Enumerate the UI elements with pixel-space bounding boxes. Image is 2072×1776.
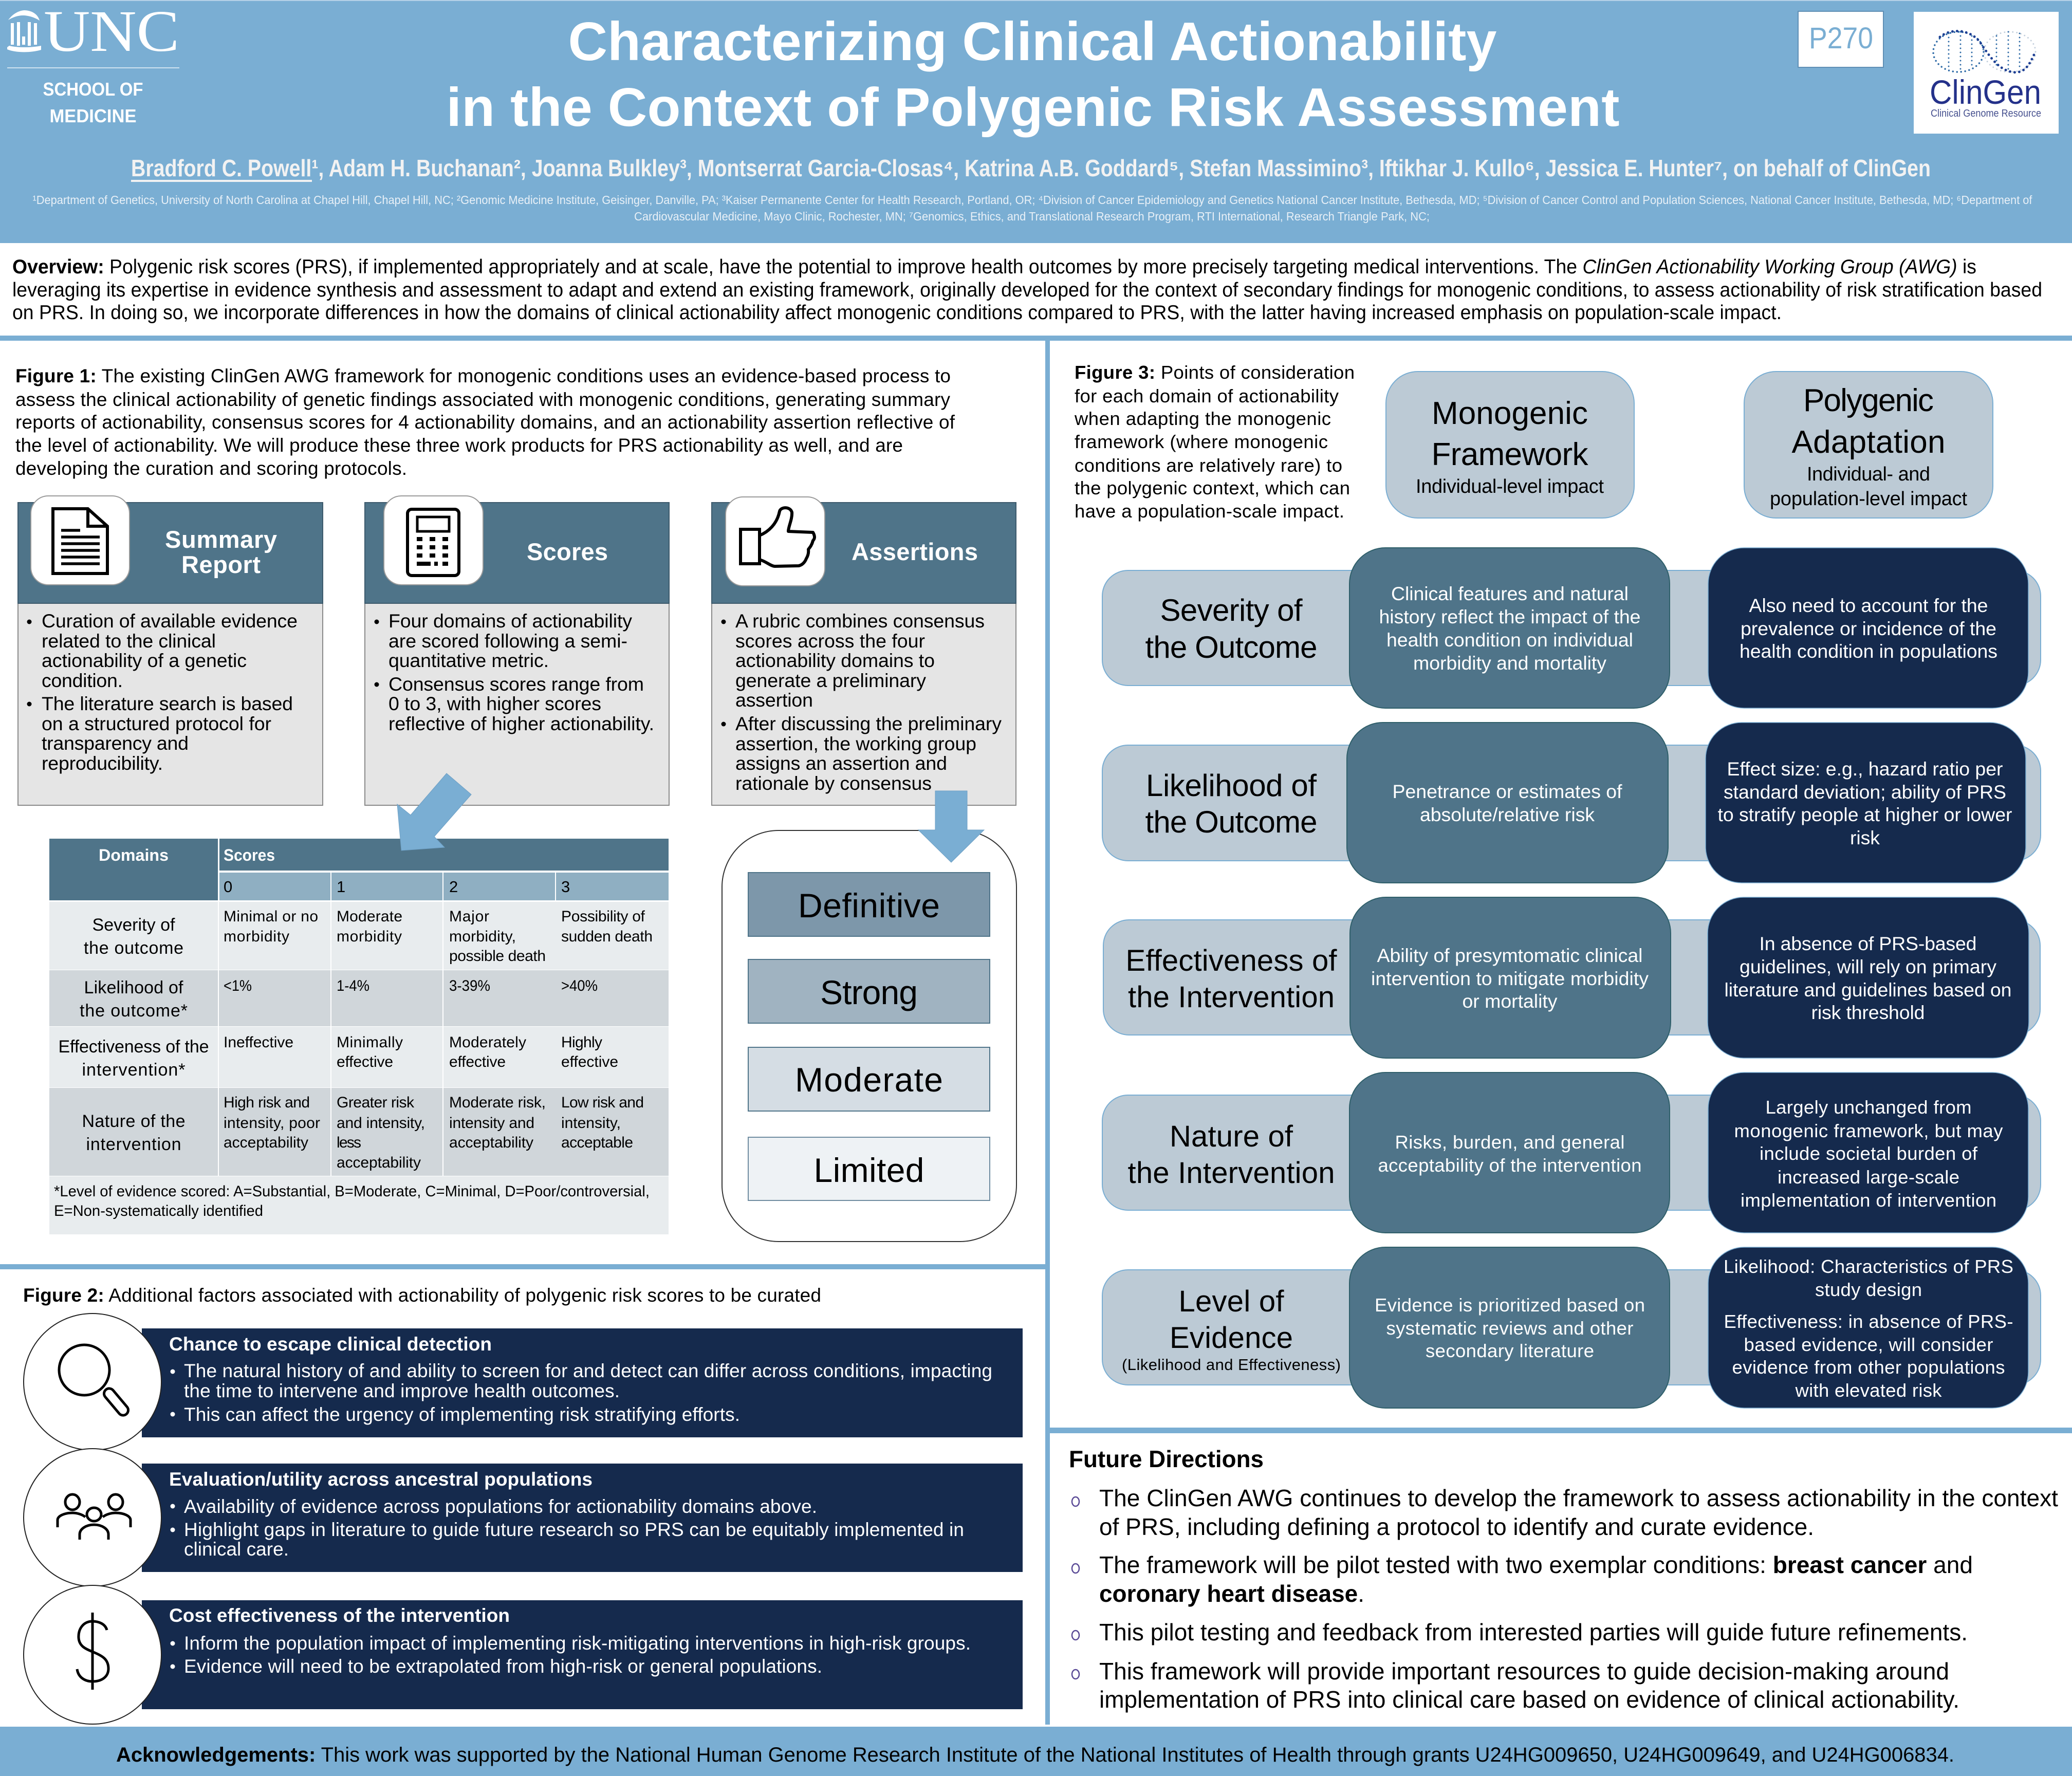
- polygenic cell: prevalence or incidence of the: [1741, 618, 1996, 639]
- monogenic cell: health condition on individual: [1386, 629, 1633, 651]
- table header: Scores: [224, 846, 275, 864]
- bullets: The natural history of and ability to screen for and detect can differ across conditions, impacting: [184, 1360, 992, 1381]
- bullets: A rubric combines consensus: [735, 610, 985, 632]
- icon: DNA helix dots: [1933, 31, 2036, 72]
- table cells: acceptability: [224, 1134, 308, 1151]
- level: moderate: Moderate: [795, 1061, 943, 1099]
- factor: ancestral populations: [24, 1449, 1023, 1586]
- label: [1125, 944, 1337, 1014]
- table footnote: [54, 1183, 650, 1219]
- label: the Outcome: [1145, 805, 1318, 839]
- figure 1 caption: [15, 365, 955, 479]
- column header: polygenic adaptation: Individual- and: [1807, 464, 1930, 485]
- figure 1 caption: developing the curation and scoring protocols.: [15, 458, 407, 479]
- table cells: less: [337, 1134, 361, 1151]
- bullets: assertion: [735, 689, 813, 711]
- table cells: acceptable: [561, 1134, 633, 1151]
- heading: Report: [181, 551, 261, 578]
- polygenic cell: with elevated risk: [1794, 1380, 1942, 1401]
- table cells: Low risk and: [561, 1094, 644, 1111]
- table cells: intensity, poor: [224, 1115, 320, 1132]
- bullets: Curation of available evidence: [42, 610, 298, 632]
- label: the Intervention: [1127, 1156, 1335, 1190]
- figure 1 caption: Figure 1: The existing ClinGen AWG framework for monogenic conditions uses an evidence-based process to: [15, 365, 951, 386]
- level: moderate: [748, 1047, 990, 1111]
- icon: document: [31, 496, 130, 585]
- icon: magnifier: [24, 1313, 161, 1450]
- polygenic cell: Likelihood: Characteristics of PRS: [1724, 1256, 2013, 1277]
- monogenic cell: [1349, 548, 1670, 708]
- bullets: condition.: [42, 670, 123, 691]
- label: the Intervention: [1128, 980, 1335, 1014]
- monogenic cell: history reflect the impact of the: [1379, 606, 1640, 627]
- bullets: actionability domains to: [735, 650, 935, 671]
- score numbers: 0: [224, 878, 232, 896]
- table cells: intensity,: [561, 1115, 621, 1132]
- bullets: [171, 1496, 964, 1560]
- table cells: morbidity: [337, 928, 402, 945]
- table cells: and intensity,: [337, 1115, 425, 1132]
- score numbers: 1: [337, 878, 345, 896]
- label: (Likelihood and Effectiveness): [1122, 1356, 1341, 1374]
- affiliations: [33, 193, 2032, 223]
- row: likelihood of the outcome: [1102, 723, 2041, 883]
- domain labels: [59, 915, 209, 1154]
- domain labels: intervention*: [82, 1060, 185, 1080]
- score numbers: [224, 878, 570, 896]
- panel: summary report: [18, 496, 323, 805]
- figure 3 caption: have a population-scale impact.: [1075, 501, 1344, 522]
- heading: Summary: [165, 526, 277, 553]
- domain labels: Likelihood of: [84, 978, 183, 997]
- polygenic cell: Largely unchanged from: [1766, 1097, 1971, 1118]
- table footnote: E=Non-systematically identified: [54, 1202, 263, 1219]
- title: in the Context of Polygenic Risk Assessment: [446, 77, 1620, 138]
- bullets: Four domains of actionability: [388, 610, 632, 632]
- table cells: [224, 908, 653, 1171]
- column header: monogenic framework: [1386, 372, 1634, 518]
- affiliations: Cardiovascular Medicine, Mayo Clinic, Rochester, MN; ⁷Genomics, Ethics, and Translational Research Program, RTI International, Research Triangle Park, NC;: [634, 210, 1430, 223]
- monogenic cell: intervention to mitigate morbidity: [1371, 968, 1649, 989]
- acknowledgements footer: Acknowledgements: This work was supported by the National Human Genome Research Institute of the National Institutes of Health through grants U24HG009650, U24HG009649, and U24HG006834.: [116, 1744, 1954, 1766]
- bullets: Inform the population impact of implementing risk-mitigating interventions in high-risk groups.: [184, 1633, 971, 1654]
- polygenic cell: [1708, 897, 2029, 1058]
- bullets: Availability of evidence across populations for actionability domains above.: [184, 1496, 817, 1517]
- logo: UNC School of Medicine: [7, 0, 179, 126]
- bullets: related to the clinical: [42, 630, 216, 652]
- table footnote: *Level of evidence scored: A=Substantial, B=Moderate, C=Minimal, D=Poor/controversial,: [54, 1183, 650, 1200]
- label: Severity of: [1160, 593, 1303, 627]
- domain labels: Effectiveness of the: [59, 1037, 209, 1057]
- icon: dollar: [24, 1585, 161, 1724]
- acknowledgements footer: [0, 1727, 2072, 1776]
- table cells: Minimal or no: [224, 908, 318, 925]
- bullets: reproducibility.: [42, 752, 163, 774]
- monogenic cell: [1347, 723, 1668, 883]
- label: Effectiveness of: [1125, 944, 1337, 977]
- bullets: actionability of a genetic: [42, 650, 247, 671]
- column header: monogenic framework: Framework: [1432, 437, 1589, 472]
- bullets: This can affect the urgency of implementing risk stratifying efforts.: [184, 1404, 740, 1425]
- column header: monogenic framework: Monogenic: [1432, 396, 1588, 431]
- icon: thumbs up: [726, 497, 825, 586]
- table header: Domains: [99, 846, 169, 864]
- level: definitive: Definitive: [798, 886, 940, 924]
- overview: leveraging its expertise in evidence synthesis and assessment to adapt and extend an existing framework, originally developed for the context of secondary findings for monogenic conditions, to assess actionability of risk stratification based: [12, 279, 2042, 301]
- polygenic cell: to stratify people at higher or lower: [1717, 804, 2012, 825]
- header band: [0, 0, 2072, 243]
- table cells: acceptability: [337, 1154, 421, 1171]
- bullets: [721, 610, 1002, 794]
- bullets: on a structured protocol for: [42, 713, 271, 734]
- bullets: Consensus scores range from: [388, 673, 644, 695]
- icon: calculator: [384, 496, 483, 585]
- table cells: acceptability: [449, 1134, 533, 1151]
- monogenic cell: Ability of presymtomatic clinical: [1377, 945, 1642, 966]
- poster number badge: [1798, 11, 1883, 67]
- bullets: assertion, the working group: [735, 733, 976, 754]
- table cells: effective: [561, 1053, 618, 1070]
- level: strong: [748, 959, 990, 1023]
- heading: [165, 526, 277, 578]
- polygenic cell: Effect size: e.g., hazard ratio per: [1727, 758, 2003, 780]
- column header: polygenic adaptation: Polygenic: [1803, 383, 1934, 418]
- polygenic cell: [1708, 1247, 2028, 1408]
- table cells: Moderate risk,: [449, 1094, 546, 1111]
- monogenic cell: secondary literature: [1426, 1340, 1594, 1361]
- polygenic cell: evidence from other populations: [1732, 1357, 2005, 1378]
- title: [446, 11, 1620, 138]
- bullets: clinical care.: [184, 1539, 289, 1560]
- polygenic cell: literature and guidelines based on: [1725, 979, 2011, 1001]
- overview: [12, 256, 2042, 324]
- monogenic cell: Risks, burden, and general: [1395, 1132, 1625, 1153]
- table header: [99, 846, 275, 864]
- row: severity of the outcome: [1102, 548, 2041, 708]
- column header: polygenic adaptation: Adaptation: [1791, 424, 1946, 460]
- label: [1127, 1120, 1335, 1190]
- bullets: [27, 610, 298, 774]
- domain labels: Severity of: [92, 915, 175, 935]
- bullets: transparency and: [42, 732, 189, 754]
- icon: Old Well: [7, 10, 41, 52]
- icon: people: [24, 1449, 161, 1586]
- polygenic cell: monogenic framework, but may: [1734, 1120, 2003, 1141]
- bullets: rationale by consensus: [735, 772, 932, 794]
- polygenic cell: include societal burden of: [1760, 1143, 1978, 1164]
- logo: ClinGen: [1914, 12, 2059, 134]
- polygenic cell: [1708, 1072, 2028, 1233]
- table cells: Greater risk: [337, 1094, 415, 1111]
- table cells: Moderate: [337, 908, 402, 925]
- monogenic cell: Clinical features and natural: [1391, 583, 1629, 604]
- label: [1122, 1285, 1341, 1374]
- level: definitive: [748, 873, 990, 936]
- logo: UNC School of Medicine: UNC: [44, 0, 179, 64]
- column header: monogenic framework: Individual-level impact: [1416, 476, 1604, 497]
- figure 3 caption: conditions are relatively rare) to: [1075, 455, 1342, 476]
- factor: cost effectiveness: [24, 1585, 1023, 1724]
- polygenic cell: standard deviation; ability of PRS: [1724, 781, 2006, 803]
- polygenic cell: risk: [1850, 827, 1880, 848]
- title: Characterizing Clinical Actionability: [568, 11, 1497, 72]
- table cells: High risk and: [224, 1094, 310, 1111]
- bullets: The literature search is based: [42, 693, 293, 714]
- arrow: scores to table: [397, 773, 471, 850]
- overview: Overview: Polygenic risk scores (PRS), if implemented appropriately and at scale, have the potential to improve health outcomes by more precisely targeting medical interventions. The ClinGen Actionability Working Group (AWG) is: [12, 256, 1976, 278]
- bullets: are scored following a semi-: [388, 630, 627, 652]
- table cells: Ineffective: [224, 1034, 293, 1051]
- logo: ClinGen: Clinical Genome Resource: [1931, 108, 2041, 119]
- polygenic cell: [1708, 548, 2028, 708]
- logo: UNC School of Medicine: SCHOOL OF: [43, 79, 143, 100]
- heading: Evaluation/utility across ancestral populations: [169, 1469, 593, 1490]
- bullets: 0 to 3, with higher scores: [388, 693, 601, 714]
- overview: on PRS. In doing so, we incorporate differences in how the domains of clinical actionability affect monogenic conditions compared to PRS, with the latter having increased emphasis on population-scale impact.: [12, 302, 1782, 324]
- figure 3 caption: the polygenic context, which can: [1075, 477, 1350, 498]
- figure 1 caption: reports of actionability, consensus scores for 4 actionability domains, and an actionability assertion reflective of: [15, 412, 955, 433]
- polygenic cell: health condition in populations: [1740, 640, 1997, 662]
- heading: Assertions: [852, 538, 978, 565]
- bullets: This pilot testing and feedback from interested parties will guide future refinements.: [1099, 1619, 1968, 1645]
- score numbers: 2: [449, 878, 458, 896]
- label: Level of: [1179, 1285, 1284, 1318]
- domain labels: the outcome: [84, 938, 183, 958]
- polygenic cell: study design: [1815, 1279, 1922, 1300]
- table cells: 3-39%: [449, 977, 490, 994]
- bullets: reflective of higher actionability.: [388, 713, 654, 734]
- table cells: >40%: [561, 977, 598, 994]
- panel: scores: [365, 496, 669, 805]
- table cells: effective: [337, 1053, 393, 1070]
- bullets: the time to intervene and improve health outcomes.: [184, 1380, 620, 1401]
- polygenic cell: In absence of PRS-based: [1760, 933, 1976, 954]
- figure 3 caption: framework (where monogenic: [1075, 431, 1328, 452]
- score numbers: 3: [561, 878, 570, 896]
- level: limited: [748, 1137, 990, 1200]
- label: the Outcome: [1145, 630, 1318, 664]
- monogenic cell: or mortality: [1463, 990, 1558, 1012]
- bullets: implementation of PRS into clinical care based on evidence of clinical actionability.: [1099, 1686, 1959, 1713]
- table cells: Highly: [561, 1034, 602, 1051]
- polygenic cell: [1706, 723, 2026, 883]
- table cells: effective: [449, 1053, 506, 1070]
- panel: assertion levels: [722, 830, 1016, 1242]
- bullets: Highlight gaps in literature to guide future research so PRS can be equitably implemented in: [184, 1519, 964, 1540]
- table cells: <1%: [224, 977, 252, 994]
- table cells: intensity and: [449, 1115, 534, 1132]
- bullets: [1072, 1485, 2058, 1713]
- monogenic cell: [1349, 1247, 1670, 1408]
- polygenic cell: implementation of intervention: [1741, 1190, 1996, 1211]
- bullets: [171, 1633, 971, 1677]
- row: nature of the intervention: [1102, 1072, 2041, 1233]
- heading: Cost effectiveness of the intervention: [169, 1605, 510, 1626]
- figure 3 caption: Figure 3: Points of consideration: [1075, 362, 1355, 383]
- figure 3 caption: [1074, 362, 1355, 522]
- bullets: [374, 610, 654, 734]
- table cells: morbidity: [224, 928, 289, 945]
- bullets: The ClinGen AWG continues to develop the framework to assess actionability in the context: [1099, 1485, 2058, 1511]
- bullets: Evidence will need to be extrapolated from high-risk or general populations.: [184, 1656, 822, 1677]
- polygenic cell: based evidence, will consider: [1744, 1334, 1993, 1355]
- monogenic cell: absolute/relative risk: [1420, 804, 1595, 825]
- polygenic cell: guidelines, will rely on primary: [1740, 956, 1996, 977]
- table cells: possible death: [449, 948, 546, 965]
- domain labels: the outcome*: [80, 1001, 188, 1021]
- table cells: Minimally: [337, 1034, 403, 1051]
- monogenic cell: systematic reviews and other: [1386, 1318, 1633, 1339]
- label: Likelihood of: [1146, 768, 1317, 803]
- label: Evidence: [1170, 1321, 1293, 1355]
- monogenic cell: acceptability of the intervention: [1378, 1155, 1641, 1176]
- bullets: assigns an assertion and: [735, 752, 947, 774]
- factor: clinical detection: [24, 1313, 1023, 1450]
- monogenic cell: Penetrance or estimates of: [1393, 781, 1622, 802]
- bullets: scores across the four: [735, 630, 925, 652]
- figure 1 caption: assess the clinical actionability of genetic findings associated with monogenic conditions, generating summary: [15, 389, 951, 410]
- monogenic cell: [1349, 1072, 1670, 1233]
- label: Nature of: [1170, 1120, 1293, 1153]
- heading: Future Directions: [1069, 1446, 1264, 1472]
- domain labels: intervention: [86, 1135, 181, 1154]
- column header: polygenic adaptation: population-level impact: [1770, 488, 1967, 510]
- scoring table: [49, 839, 669, 1234]
- polygenic cell: Effectiveness: in absence of PRS-: [1724, 1311, 2013, 1332]
- table cells: sudden death: [561, 928, 653, 945]
- bullets: After discussing the preliminary: [735, 713, 1002, 734]
- heading: Scores: [527, 538, 608, 565]
- polygenic cell: Also need to account for the: [1749, 595, 1988, 616]
- panel: assertions: [712, 497, 1016, 805]
- bullets: [171, 1360, 992, 1425]
- figure 2 caption: Figure 2: Additional factors associated with actionability of polygenic risk scores to be curated: [23, 1285, 821, 1306]
- row: effectiveness of the intervention: [1103, 897, 2040, 1058]
- table cells: morbidity,: [449, 928, 516, 945]
- future directions: [1069, 1446, 2058, 1713]
- bullets: of PRS, including defining a protocol to identify and curate evidence.: [1099, 1513, 1814, 1540]
- label: [1145, 768, 1318, 839]
- table cells: Possibility of: [561, 908, 645, 925]
- figure 3 caption: when adapting the monogenic: [1074, 408, 1331, 429]
- logo: UNC School of Medicine: MEDICINE: [49, 105, 137, 126]
- label: [1145, 593, 1318, 664]
- figure 3 caption: for each domain of actionability: [1075, 385, 1339, 406]
- table cells: Moderately: [449, 1034, 526, 1051]
- heading: Chance to escape clinical detection: [169, 1334, 492, 1355]
- level: limited: Limited: [814, 1151, 924, 1189]
- figure 1 caption: the level of actionability. We will produce these three work products for PRS actionability as well, and are: [15, 435, 903, 456]
- polygenic cell: risk threshold: [1811, 1002, 1925, 1023]
- logo: ClinGen: ClinGen: [1930, 73, 2041, 111]
- monogenic cell: Evidence is prioritized based on: [1375, 1294, 1645, 1316]
- poster number badge: P270: [1809, 22, 1873, 55]
- monogenic cell: [1350, 897, 1671, 1058]
- bullets: generate a preliminary: [735, 670, 926, 691]
- bullets: quantitative metric.: [388, 650, 549, 671]
- polygenic cell: increased large-scale: [1778, 1167, 1959, 1188]
- table cells: 1-4%: [337, 977, 369, 994]
- domain labels: Nature of the: [82, 1112, 185, 1131]
- bullets: coronary heart disease.: [1099, 1580, 1364, 1607]
- bullets: The framework will be pilot tested with two exemplar conditions: breast cancer and: [1099, 1551, 1973, 1578]
- bullets: This framework will provide important resources to guide decision-making around: [1099, 1658, 1949, 1685]
- column header: polygenic adaptation: [1744, 372, 1993, 518]
- level: strong: Strong: [820, 973, 918, 1011]
- arrow: assertions to levels: [918, 791, 984, 862]
- table cells: Major: [449, 908, 489, 925]
- monogenic cell: morbidity and mortality: [1413, 652, 1606, 674]
- row: level of evidence: [1102, 1247, 2041, 1408]
